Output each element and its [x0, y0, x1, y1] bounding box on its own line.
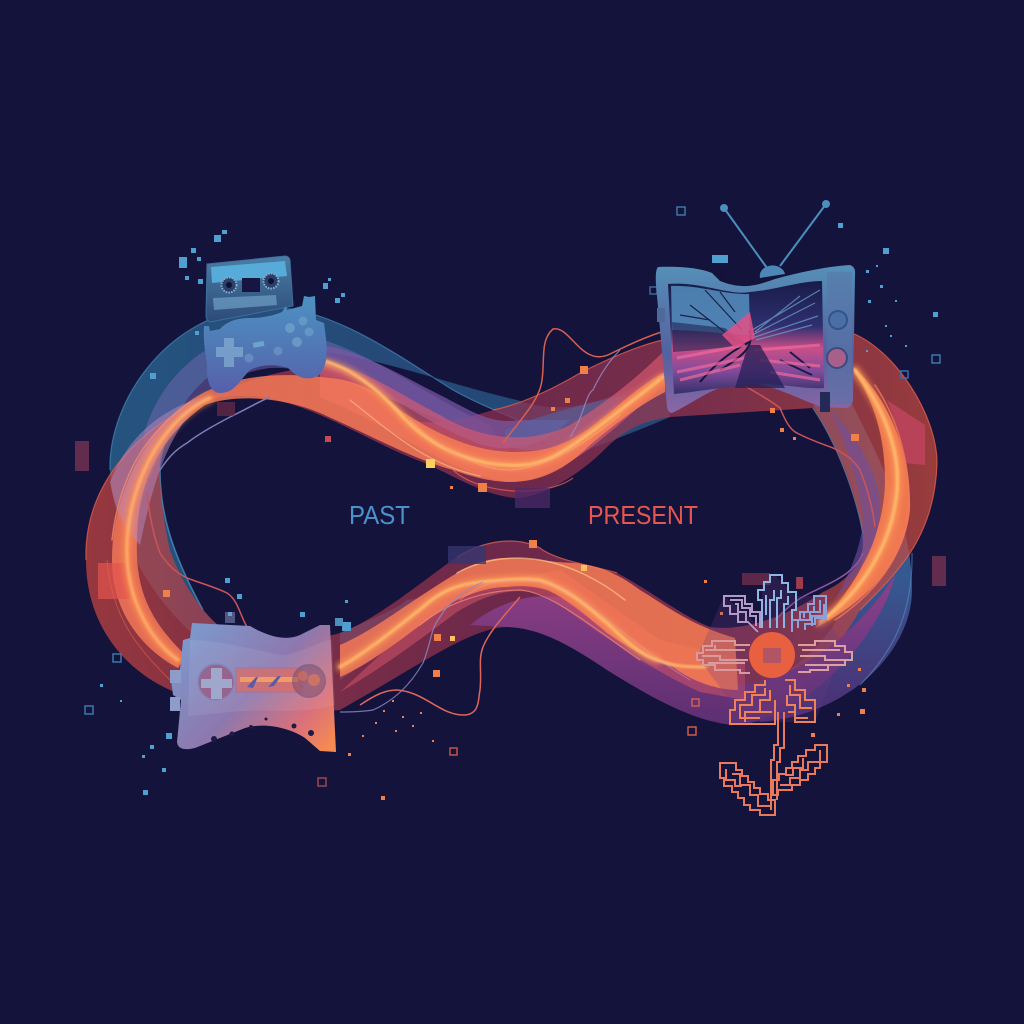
- stem: [771, 712, 784, 810]
- flower petal tint: [697, 575, 852, 722]
- icon: circuit flower: [697, 575, 852, 815]
- leaf: left: [720, 763, 775, 815]
- leaf: right: [773, 745, 827, 795]
- petal: bottom-right: [785, 680, 815, 722]
- blue overlap, centre: [505, 395, 625, 450]
- pixel particles: blue: [100, 223, 938, 795]
- icon: game controller (top-left): [204, 296, 327, 393]
- petal: top-left: [724, 596, 760, 632]
- red glitch patch, left lobe: [98, 563, 130, 599]
- tv knobs: [827, 272, 852, 404]
- petal: top-right: [792, 596, 826, 632]
- pale mauve overlap, left lobe: [110, 395, 210, 545]
- petal: top: [758, 575, 796, 628]
- magenta patch, right lobe: [887, 400, 925, 465]
- pink band, top strand: [320, 350, 665, 482]
- antenna: [721, 201, 829, 268]
- label: present: PRESENT: [588, 500, 698, 530]
- faded glitch bars: [75, 402, 946, 589]
- orange band, bottom strand: [340, 558, 738, 690]
- icon: cassette tape: [206, 256, 293, 322]
- orange band, right lobe: [815, 360, 910, 628]
- orange band, top strand and left lobe: [112, 372, 665, 668]
- flower centre: [749, 632, 795, 678]
- mauve band, top strand: [320, 345, 570, 448]
- thin connector wires: [147, 329, 875, 715]
- icon: warped retro game controller (bottom-left): [170, 612, 343, 752]
- glowing strands: [107, 360, 909, 680]
- main ribbon ring: [86, 333, 937, 725]
- petal: right: [798, 641, 852, 672]
- blue ribbon, bottom centre-left: [340, 590, 470, 680]
- pink band, bottom strand: [340, 570, 745, 700]
- blue outer ribbon, top-left and centre: [110, 307, 670, 640]
- label: past: PAST: [349, 500, 410, 530]
- pixel particles: orange: [163, 366, 866, 800]
- petal: left: [697, 641, 750, 673]
- crt screen: [668, 281, 824, 394]
- purple band, inner right lobe: [830, 410, 880, 600]
- petal: bottom-left: [730, 680, 775, 724]
- blue outer ribbon, right: [740, 400, 912, 722]
- pixel particles: outlined squares: [85, 207, 940, 786]
- purple band, lower right: [470, 575, 895, 725]
- icon: warped television: [656, 201, 855, 413]
